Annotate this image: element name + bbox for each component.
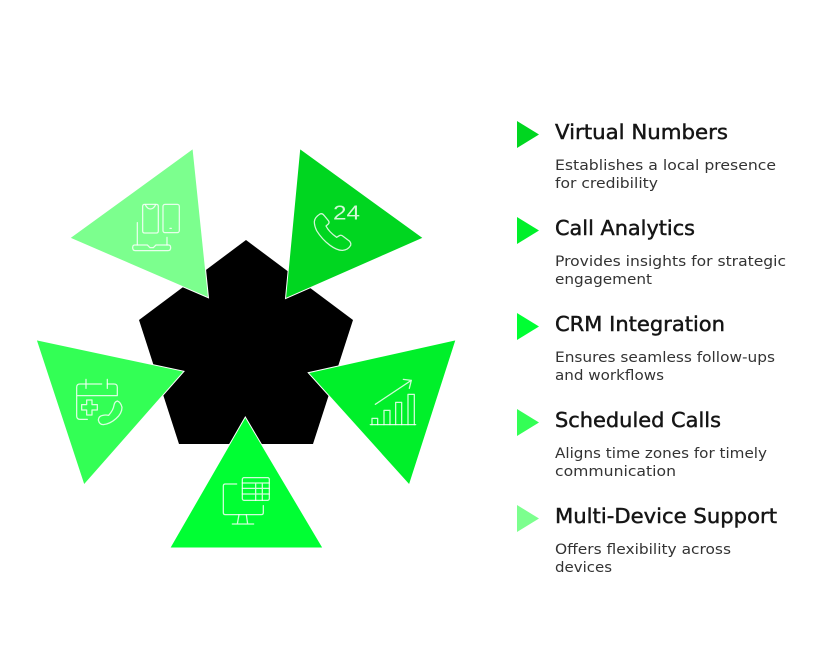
icon: calendar with medical cross and phone xyxy=(77,379,122,425)
legend item: Multi-Device Support xyxy=(517,504,777,576)
legend item: CRM Integration xyxy=(517,312,775,384)
heading: Call Analytics: Call Analytics xyxy=(555,216,695,240)
top-left triangle shape xyxy=(70,148,208,298)
heading: Multi-Device Support: Multi-Device Support xyxy=(555,504,777,528)
heading: CRM Integration: CRM Integration xyxy=(555,312,725,336)
left triangle shape xyxy=(36,340,184,485)
icon label: 24: 24 xyxy=(333,202,360,224)
marker: Multi-Device Support xyxy=(517,505,539,532)
icon: phones and laptop xyxy=(133,204,179,251)
icon: handset xyxy=(314,214,351,250)
marker: Virtual Numbers xyxy=(517,121,539,148)
description: Call Analytics: engagement xyxy=(555,272,652,288)
description: Scheduled Calls: Aligns time zones for timely xyxy=(555,446,767,462)
description: Multi-Device Support xyxy=(555,542,731,576)
description: CRM Integration: and workflows xyxy=(555,368,664,384)
description: Virtual Numbers: for credibility xyxy=(555,176,658,192)
panel: right triangle, call analytics xyxy=(308,340,456,485)
description: Multi-Device Support: Offers flexibility across xyxy=(555,542,731,558)
central black pentagon xyxy=(139,240,353,444)
bottom triangle shape xyxy=(170,417,323,548)
top-right triangle shape xyxy=(286,148,423,299)
description: Scheduled Calls xyxy=(555,446,767,480)
legend item: Virtual Numbers xyxy=(517,120,776,192)
legend item: Scheduled Calls xyxy=(517,408,767,480)
right triangle shape xyxy=(308,340,456,485)
description: CRM Integration xyxy=(555,350,775,384)
heading: Virtual Numbers: Virtual Numbers xyxy=(555,120,728,144)
panel: top-right triangle, virtual numbers xyxy=(286,148,423,299)
panel: top-left triangle, multi-device support xyxy=(70,148,208,298)
icon: monitor with table xyxy=(223,478,269,524)
icon: 24-hour phone xyxy=(314,202,360,250)
marker: Scheduled Calls xyxy=(517,409,539,436)
panel: left triangle, scheduled calls xyxy=(36,340,184,485)
description: Call Analytics xyxy=(555,254,786,288)
legend list xyxy=(517,120,786,576)
description: Virtual Numbers xyxy=(555,158,776,192)
description: Virtual Numbers: Establishes a local presence xyxy=(555,158,776,174)
description: Multi-Device Support: devices xyxy=(555,560,612,576)
marker: Call Analytics xyxy=(517,217,539,244)
description: CRM Integration: Ensures seamless follow-ups xyxy=(555,350,775,366)
marker: CRM Integration xyxy=(517,313,539,340)
heading: Scheduled Calls: Scheduled Calls xyxy=(555,408,721,432)
panel: bottom triangle, CRM integration xyxy=(170,417,323,548)
legend item: Call Analytics xyxy=(517,216,786,288)
description: Call Analytics: Provides insights for strategic xyxy=(555,254,786,270)
description: Scheduled Calls: communication xyxy=(555,464,676,480)
icon: rising bar chart xyxy=(370,379,416,425)
